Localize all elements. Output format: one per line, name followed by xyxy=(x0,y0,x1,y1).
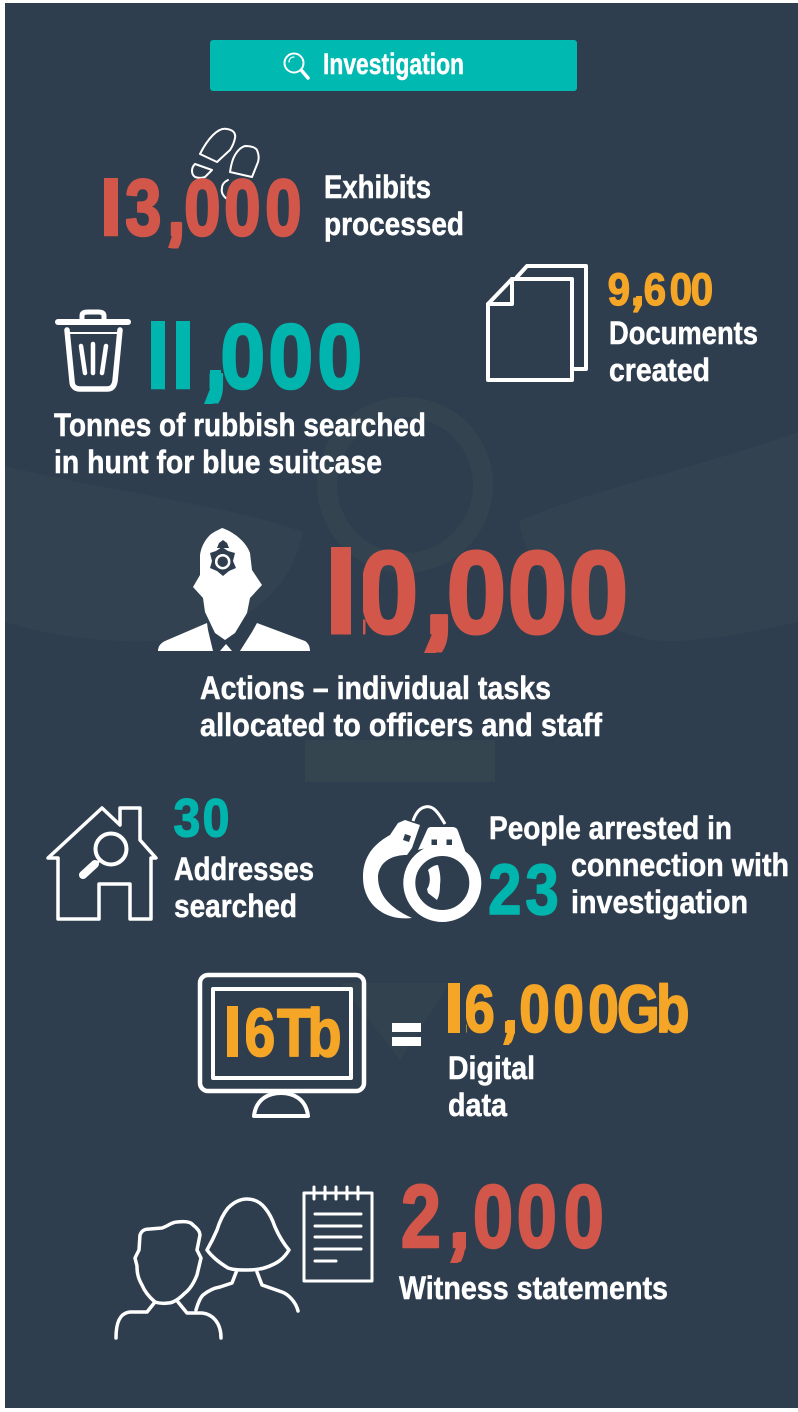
icon: witnesses xyxy=(116,1199,298,1338)
icon: rubbish bin xyxy=(58,312,128,389)
icon: footprints xyxy=(192,129,259,199)
label: Exhibits xyxy=(324,169,431,205)
label: Addresses xyxy=(174,851,314,887)
icon: magnifying glass xyxy=(284,54,308,78)
number: 23 xyxy=(488,849,559,929)
stat: 9,600 documents xyxy=(488,265,758,388)
stat: 13,000 exhibits xyxy=(90,129,464,252)
number: 11,000 xyxy=(133,306,362,408)
stat: 10,000 actions xyxy=(158,527,628,743)
icon: documents xyxy=(488,266,586,380)
icon: notepad xyxy=(304,1187,372,1281)
icon: police officer xyxy=(158,528,310,651)
heading: Investigation: Investigation xyxy=(323,48,464,81)
number: 13,000 xyxy=(90,163,302,252)
stat: 16Tb digital data xyxy=(200,972,690,1123)
number: 10,000 xyxy=(307,527,628,658)
label: data xyxy=(448,1087,507,1123)
stat: 11,000 tonnes xyxy=(54,306,426,480)
header banner xyxy=(210,40,577,91)
number: 9,600 xyxy=(608,265,713,316)
label: allocated to officers and staff xyxy=(200,707,602,743)
icon: house with magnifier xyxy=(48,808,156,919)
label: Tonnes of rubbish searched xyxy=(54,407,426,443)
label: created xyxy=(609,352,710,388)
number: 16,000Gb xyxy=(437,972,690,1046)
label: Actions – individual tasks xyxy=(200,670,551,706)
equals sign xyxy=(392,1023,421,1046)
label: People arrested in xyxy=(489,810,732,846)
stat: 23 people arrested xyxy=(363,807,789,929)
stat: 30 addresses xyxy=(48,787,314,924)
label: investigation xyxy=(571,884,748,920)
label: Documents xyxy=(609,315,758,351)
monitor value xyxy=(227,1006,340,1058)
monitor value: 16Tb xyxy=(215,996,342,1071)
label: processed xyxy=(324,206,464,242)
icon: handcuffs xyxy=(363,807,475,918)
label: in hunt for blue suitcase xyxy=(54,444,382,480)
number: 30 xyxy=(173,787,230,848)
label: Witness statements xyxy=(399,1270,668,1306)
label: searched xyxy=(174,888,297,924)
label: Digital xyxy=(448,1050,535,1086)
stat: 2,000 witness statements xyxy=(116,1168,668,1338)
number: 2,000 xyxy=(401,1168,604,1267)
icon: monitor xyxy=(200,975,364,1116)
